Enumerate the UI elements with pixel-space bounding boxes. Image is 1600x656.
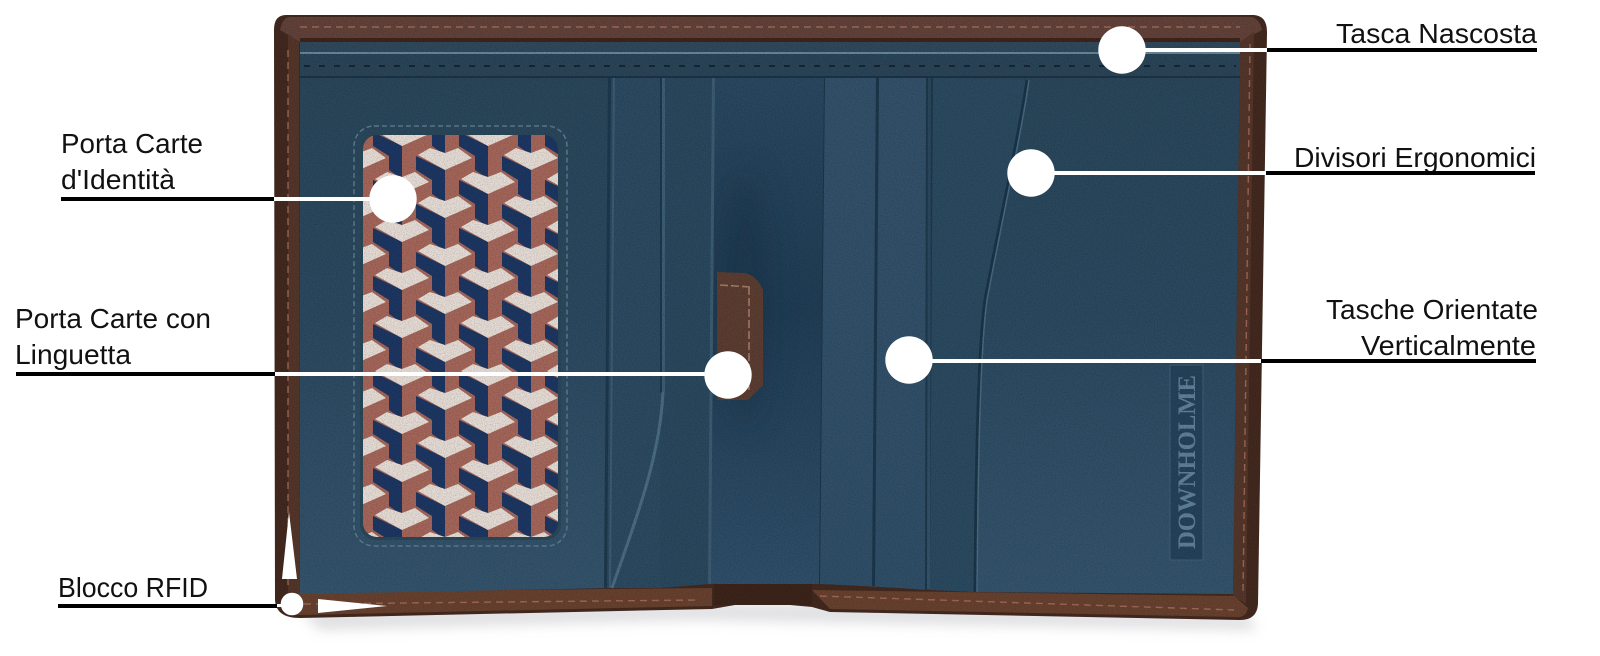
wallet	[274, 15, 1267, 620]
callout: Porta Carte d'Identità	[61, 128, 417, 223]
callout: Tasca Nascosta	[1098, 18, 1537, 74]
ID window pattern	[363, 135, 558, 537]
label line 1: Porta Carte con	[15, 303, 211, 334]
card pull tab	[717, 272, 763, 400]
stitching	[288, 27, 1250, 610]
top flap dark edge	[300, 38, 1240, 42]
label line 1: Tasche Orientate	[1326, 294, 1538, 325]
centre gusset	[710, 78, 826, 584]
ID window edge	[360, 132, 561, 540]
left card slots	[604, 78, 715, 588]
floor shadow under wallet	[300, 604, 1256, 630]
callout: Tasche Orientate Verticalmente	[885, 294, 1538, 384]
ID window stitching	[354, 126, 567, 546]
centre notch	[714, 583, 812, 605]
leather border	[274, 15, 1267, 620]
top ridge band	[300, 42, 1240, 78]
top flap highlight	[280, 17, 1262, 42]
label: Tasca Nascosta	[1336, 18, 1537, 49]
side inner stripes	[288, 32, 1254, 604]
leather grain overlay	[274, 15, 1267, 620]
label: Divisori Ergonomici	[1294, 142, 1536, 173]
label: Blocco RFID	[58, 572, 208, 603]
RFID white arrows	[282, 512, 387, 613]
label line 1: Porta Carte	[61, 128, 203, 159]
embossed logo: DOWNHOLME	[1174, 375, 1201, 549]
label line 2: d'Identità	[61, 164, 175, 195]
label line 2: Verticalmente	[1361, 330, 1536, 361]
bottom band	[284, 588, 1248, 617]
callout: Divisori Ergonomici	[1007, 142, 1536, 197]
label line 2: Linguetta	[15, 339, 131, 370]
callout: Porta Carte con Linguetta	[15, 303, 752, 399]
right card slots	[820, 78, 933, 590]
navy interior	[300, 42, 1240, 594]
large pocket with ergonomic curve	[930, 78, 1029, 592]
callout: Blocco RFID	[58, 572, 303, 615]
